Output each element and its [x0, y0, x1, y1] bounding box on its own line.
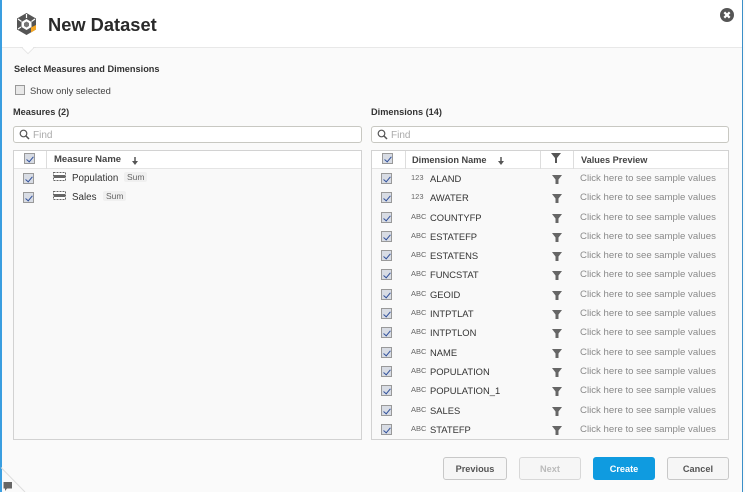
dimensions heading: Dimensions (14)	[371, 107, 442, 117]
dimension rows: ESTATENS	[430, 250, 478, 261]
dimension rows: Click here to see sample values	[580, 231, 716, 242]
measures search box: Find	[33, 130, 52, 141]
dimension rows: Click here to see sample values	[580, 192, 716, 203]
dimension rows: Click here to see sample values	[580, 424, 716, 435]
next button: Next	[540, 464, 560, 474]
dimension rows: STATEFP	[430, 424, 471, 435]
dimension rows: SALES	[430, 405, 460, 416]
measure row: Sales: Sales	[72, 192, 97, 203]
dimension rows: Click here to see sample values	[580, 173, 716, 184]
dimension rows: POPULATION_1	[430, 385, 500, 396]
dimension rows: Click here to see sample values	[580, 405, 716, 416]
dimension rows: 123	[411, 173, 424, 182]
dimension rows	[381, 173, 716, 435]
dimension rows: Click here to see sample values	[580, 327, 716, 338]
dimension rows: ABC	[411, 250, 426, 259]
icon: comment corner	[0, 467, 26, 492]
panel: dimensions table	[371, 150, 729, 440]
dimension rows: ALAND	[430, 173, 461, 184]
measures table header	[14, 151, 361, 169]
section heading: Select Measures and Dimensions	[14, 64, 160, 74]
measure row: Sales	[23, 191, 126, 203]
dimension rows: ABC	[411, 308, 426, 317]
dimensions table header: Dimension Name	[412, 155, 487, 165]
measure row: Sales: Sum	[106, 191, 123, 201]
create button	[593, 456, 655, 480]
dimension rows: Click here to see sample values	[580, 308, 716, 319]
dimensions table header: Values Preview	[581, 155, 647, 165]
show only selected checkbox: Show only selected	[30, 85, 111, 96]
header band	[2, 0, 742, 48]
dimensions table header	[372, 151, 728, 169]
dimension rows: Click here to see sample values	[580, 347, 716, 358]
dimensions search box: Find	[391, 130, 410, 141]
measure row: Population: Sum	[127, 172, 144, 182]
dimension rows: FUNCSTAT	[430, 269, 479, 280]
dimension rows: ABC	[411, 327, 426, 336]
dimension rows: Click here to see sample values	[580, 385, 716, 396]
measures search box	[13, 126, 362, 143]
dimension rows: INTPTLAT	[430, 308, 474, 319]
previous button: Previous	[456, 464, 494, 474]
dimension rows: ABC	[411, 347, 426, 356]
measures heading: Measures (2)	[13, 107, 69, 117]
cancel button: Cancel	[683, 464, 713, 474]
measure row: Population: Population	[72, 173, 118, 184]
measures table header: Measure Name	[54, 154, 121, 165]
dimension rows: ABC	[411, 269, 426, 278]
dimension rows: AWATER	[430, 192, 469, 203]
dimension rows: POPULATION	[430, 366, 490, 377]
title: New Dataset	[48, 14, 157, 35]
panel: measures table	[13, 150, 362, 440]
dimension rows: INTPTLON	[430, 327, 476, 338]
dimension rows: Click here to see sample values	[580, 366, 716, 377]
dimension rows: Click here to see sample values	[580, 289, 716, 300]
dimension rows: ABC	[411, 289, 426, 298]
dimension rows: ABC	[411, 212, 426, 221]
dimension rows: ABC	[411, 366, 426, 375]
dimension rows: ABC	[411, 231, 426, 240]
dimension rows: NAME	[430, 347, 457, 358]
header pointer notch	[22, 47, 34, 54]
window side borders	[0, 0, 2, 492]
previous button	[443, 456, 507, 480]
icon: close button	[720, 8, 734, 22]
dimension rows: COUNTYFP	[430, 212, 482, 223]
measure row: Population	[23, 172, 147, 184]
dimension rows: ABC	[411, 405, 426, 414]
dimension rows: 123	[411, 192, 424, 201]
dimension rows: ABC	[411, 424, 426, 433]
dimensions search box	[371, 126, 729, 143]
dimension rows: ESTATEFP	[430, 231, 477, 242]
next button	[519, 456, 581, 480]
icon: dataset logo	[17, 13, 36, 35]
cancel button	[667, 456, 729, 480]
dimension rows: Click here to see sample values	[580, 269, 716, 280]
create button: Create	[610, 464, 638, 474]
dimension rows: GEOID	[430, 289, 460, 300]
dimension rows: Click here to see sample values	[580, 212, 716, 223]
dimension rows: Click here to see sample values	[580, 250, 716, 261]
dimension rows: ABC	[411, 385, 426, 394]
